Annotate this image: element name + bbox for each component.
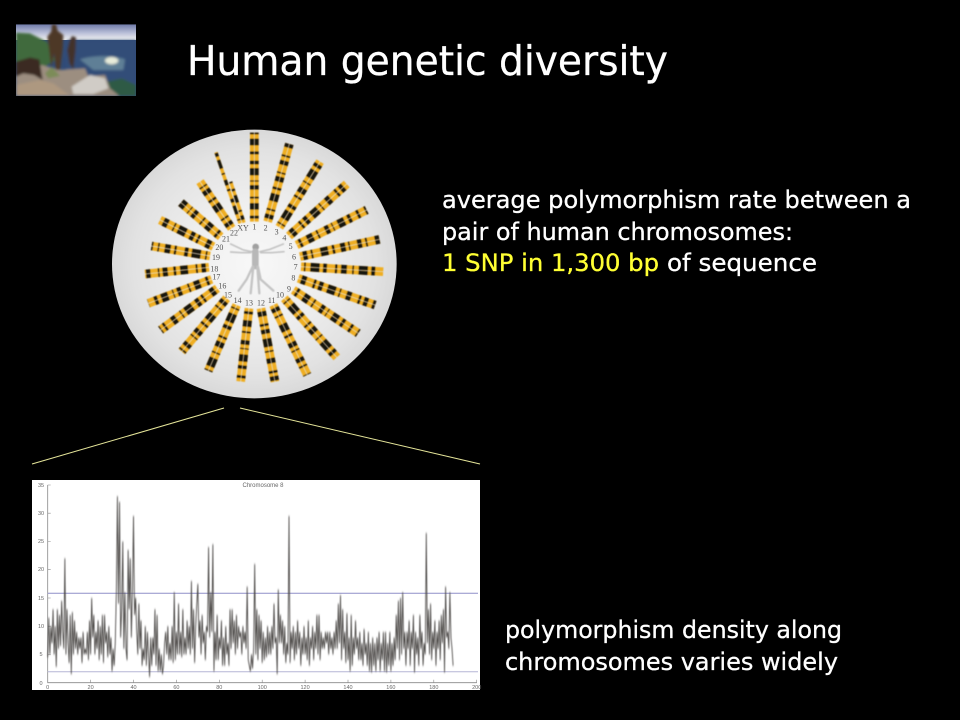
chromosome disc diagram [112,130,397,398]
axes and tick labels: 10 [38,624,44,630]
chart background [32,480,480,690]
axes and tick labels: 60 [173,685,179,691]
chromosome numbers: 12 [257,299,265,308]
axes and tick labels: 80 [216,685,222,691]
axes and tick labels: 0 [46,685,49,691]
icon: Vitruvian man [231,244,284,293]
threshold lines [48,593,478,672]
chromosome numbers: 18 [210,265,218,274]
zoom connector lines [32,408,480,464]
disc background [112,130,397,398]
body text: polymorphism rate: of sequence [667,249,817,277]
axes and tick labels: 20 [88,685,94,691]
body text: polymorphism rate: 1 SNP in 1,300 bp [442,249,659,277]
chromosome numbers: 16 [218,282,226,291]
chromosome numbers: 1 [252,223,256,232]
axes and tick labels: 140 [343,685,353,691]
body text: polymorphism density: polymorphism density along [505,616,842,644]
axes and tick labels: 30 [38,511,44,517]
body text: polymorphism density [505,616,842,676]
body text: polymorphism rate [442,186,911,277]
axes and tick labels: 180 [429,685,438,691]
chromosome numbers: 14 [234,296,242,305]
chromosome numbers: 17 [212,273,220,282]
body text: polymorphism rate: pair of human chromosomes: [442,218,793,246]
chromosome set [145,133,383,382]
chromosome numbers: XY [237,223,249,232]
photo: early humans on a cliff [16,24,136,97]
chromosome numbers: 7 [294,263,298,272]
chromosome numbers: 10 [276,290,284,299]
chromosome numbers: 11 [268,296,276,305]
body text: polymorphism rate: average polymorphism rate between a [442,186,911,214]
density trace [48,496,453,677]
axes and tick labels: 25 [38,539,44,545]
axes and tick labels: 20 [38,567,44,573]
chromosome numbers: 4 [282,233,286,242]
chromosome numbers: 2 [264,223,268,232]
axes and tick labels: 160 [386,685,395,691]
axes and tick labels: 120 [301,685,310,691]
axes and tick labels: 100 [258,685,267,691]
chromosome numbers: 3 [275,228,279,237]
chromosome numbers [210,223,298,308]
axes and tick labels: 15 [38,596,44,602]
chart: polymorphism density along chromosome 8 [32,480,481,691]
axes and tick labels: 40 [130,685,137,691]
chromosome numbers: 21 [222,234,230,243]
chromosome numbers: 6 [292,253,296,262]
body text: polymorphism density: chromosomes varies widely [505,648,838,676]
chromosome numbers: 8 [291,274,295,283]
chromosome numbers: 22 [230,229,238,238]
chromosome numbers: 15 [224,290,232,299]
axes and tick labels: 200 [472,685,481,691]
axes and tick labels: 5 [39,652,43,658]
title: Human genetic diversity [187,37,668,85]
axes and tick labels: 0 [39,681,43,687]
axes and tick labels: 35 [38,483,44,489]
chromosome numbers: 9 [287,284,291,293]
chromosome numbers: 19 [212,253,220,262]
chromosome numbers: 13 [245,299,253,308]
axes and tick labels [38,483,481,691]
chart title: Chromosome 8 [242,483,284,489]
chromosome numbers: 20 [215,243,223,252]
chromosome numbers: 5 [289,242,293,251]
